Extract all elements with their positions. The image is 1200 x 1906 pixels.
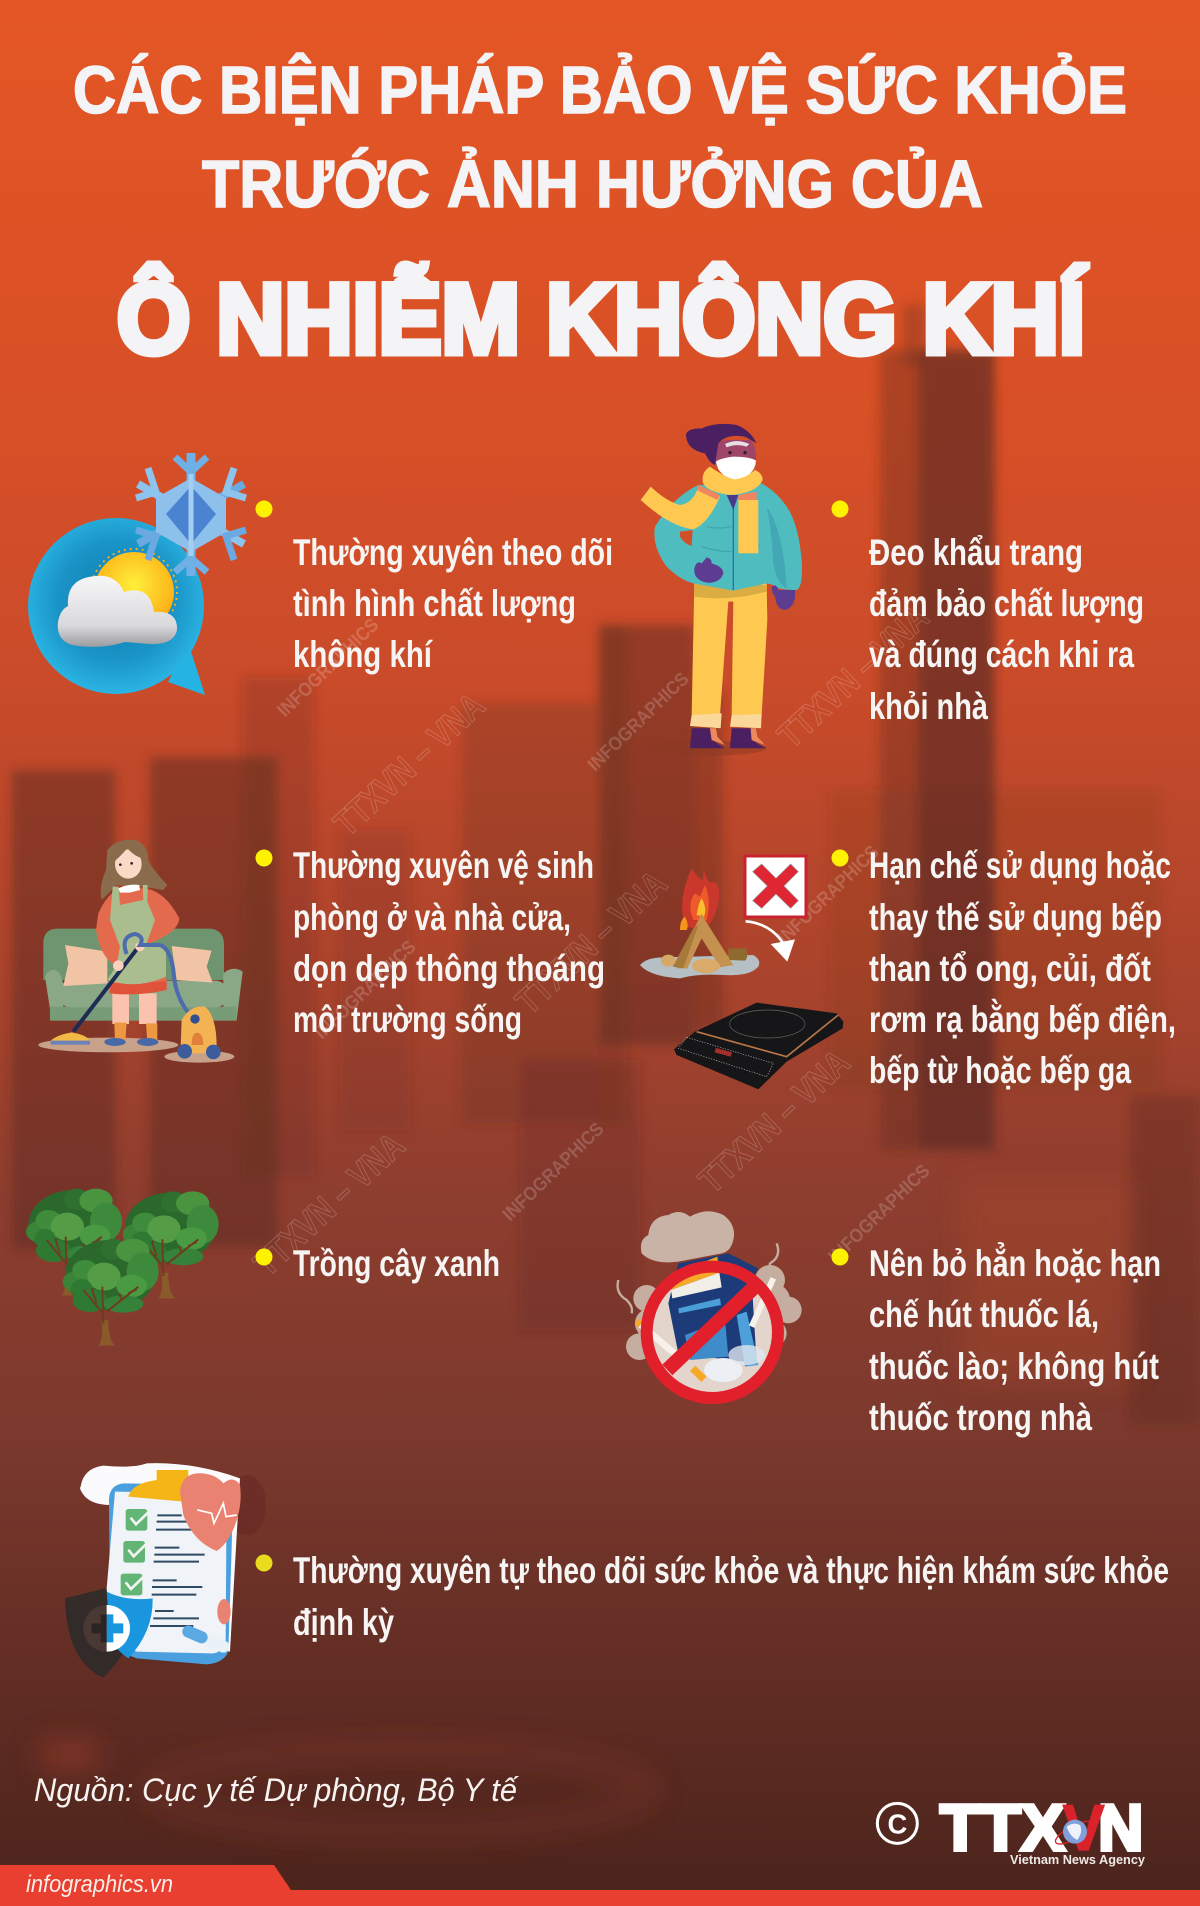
watermarks (245, 596, 936, 1284)
text: weather: tình hình chất lượng (293, 583, 576, 624)
bullet: health (256, 1554, 272, 1572)
title (73, 53, 1127, 374)
watermarks: INFOGRAPHICS (825, 1161, 934, 1268)
text: smoking: chế hút thuốc lá, (869, 1294, 1099, 1335)
text: cleaning: phòng ở và nhà cửa, (293, 897, 571, 938)
watermarks: INFOGRAPHICS (311, 937, 420, 1044)
icon: weather bubble with snowflake (28, 453, 246, 695)
watermarks: INFOGRAPHICS (274, 615, 383, 722)
text: smoking (869, 1242, 1161, 1438)
watermarks: INFOGRAPHICS (499, 1119, 608, 1226)
icon: no smoking (618, 1211, 802, 1398)
footer site: infographics.vn (26, 1871, 173, 1898)
text: weather (293, 532, 613, 675)
watermarks: TTXVN – VNA (245, 1124, 412, 1284)
text: health: định kỳ (293, 1602, 394, 1643)
title: Ô NHIỄM KHÔNG KHÍ (117, 263, 1087, 374)
icon: woman vacuuming (38, 840, 243, 1063)
icon: campfire replaced by induction cooker (640, 856, 843, 1089)
bullet: stove (832, 850, 848, 866)
watermarks: TTXVN – VNA (507, 862, 674, 1022)
logo: TTXVN: TTX (940, 1791, 1065, 1864)
bullet: mask (832, 500, 848, 518)
bullet: cleaning (256, 850, 272, 866)
text: trees: Trồng cây xanh (293, 1243, 500, 1284)
source: Nguồn: Cục y tế Dự phòng, Bộ Y tế (34, 1772, 519, 1808)
icon: health checklist (65, 1463, 266, 1678)
footer bar (0, 1865, 1200, 1906)
bullet: smoking (832, 1248, 848, 1266)
bullet: trees (256, 1248, 272, 1266)
text: weather: không khí (293, 634, 433, 675)
text: cleaning: môi trường sống (293, 999, 522, 1040)
text: cleaning: Thường xuyên vệ sinh (293, 845, 594, 886)
text: mask: khỏi nhà (869, 686, 988, 727)
bullet: weather (256, 500, 272, 518)
watermarks: TTXVN – VNA (769, 596, 936, 756)
watermarks: INFOGRAPHICS (774, 842, 883, 949)
text: weather: Thường xuyên theo dõi (293, 532, 613, 573)
text: stove (869, 845, 1176, 1091)
text: mask (869, 532, 1144, 727)
logo: TTXVN: V (1063, 1791, 1105, 1864)
watermarks: TTXVN – VNA (690, 1041, 857, 1201)
logo: TTXVN: Vietnam News Agency (1010, 1853, 1145, 1867)
watermarks: INFOGRAPHICS (584, 669, 693, 776)
text: cleaning: dọn dẹp thông thoáng (293, 948, 605, 989)
text: mask: Đeo khẩu trang (869, 532, 1083, 573)
icon: trees (26, 1189, 219, 1346)
text: smoking: thuốc trong nhà (869, 1397, 1092, 1438)
logo: TTXVN (877, 1791, 1145, 1867)
text: cleaning (293, 845, 605, 1040)
title: TRƯỚC ẢNH HƯỞNG CỦA (202, 147, 983, 222)
text: health (293, 1550, 1169, 1643)
watermarks: TTXVN – VNA (325, 684, 492, 844)
logo: TTXVN: C (887, 1808, 907, 1839)
icon: person wearing mask (641, 424, 802, 756)
logo: TTXVN: N (1098, 1791, 1143, 1864)
